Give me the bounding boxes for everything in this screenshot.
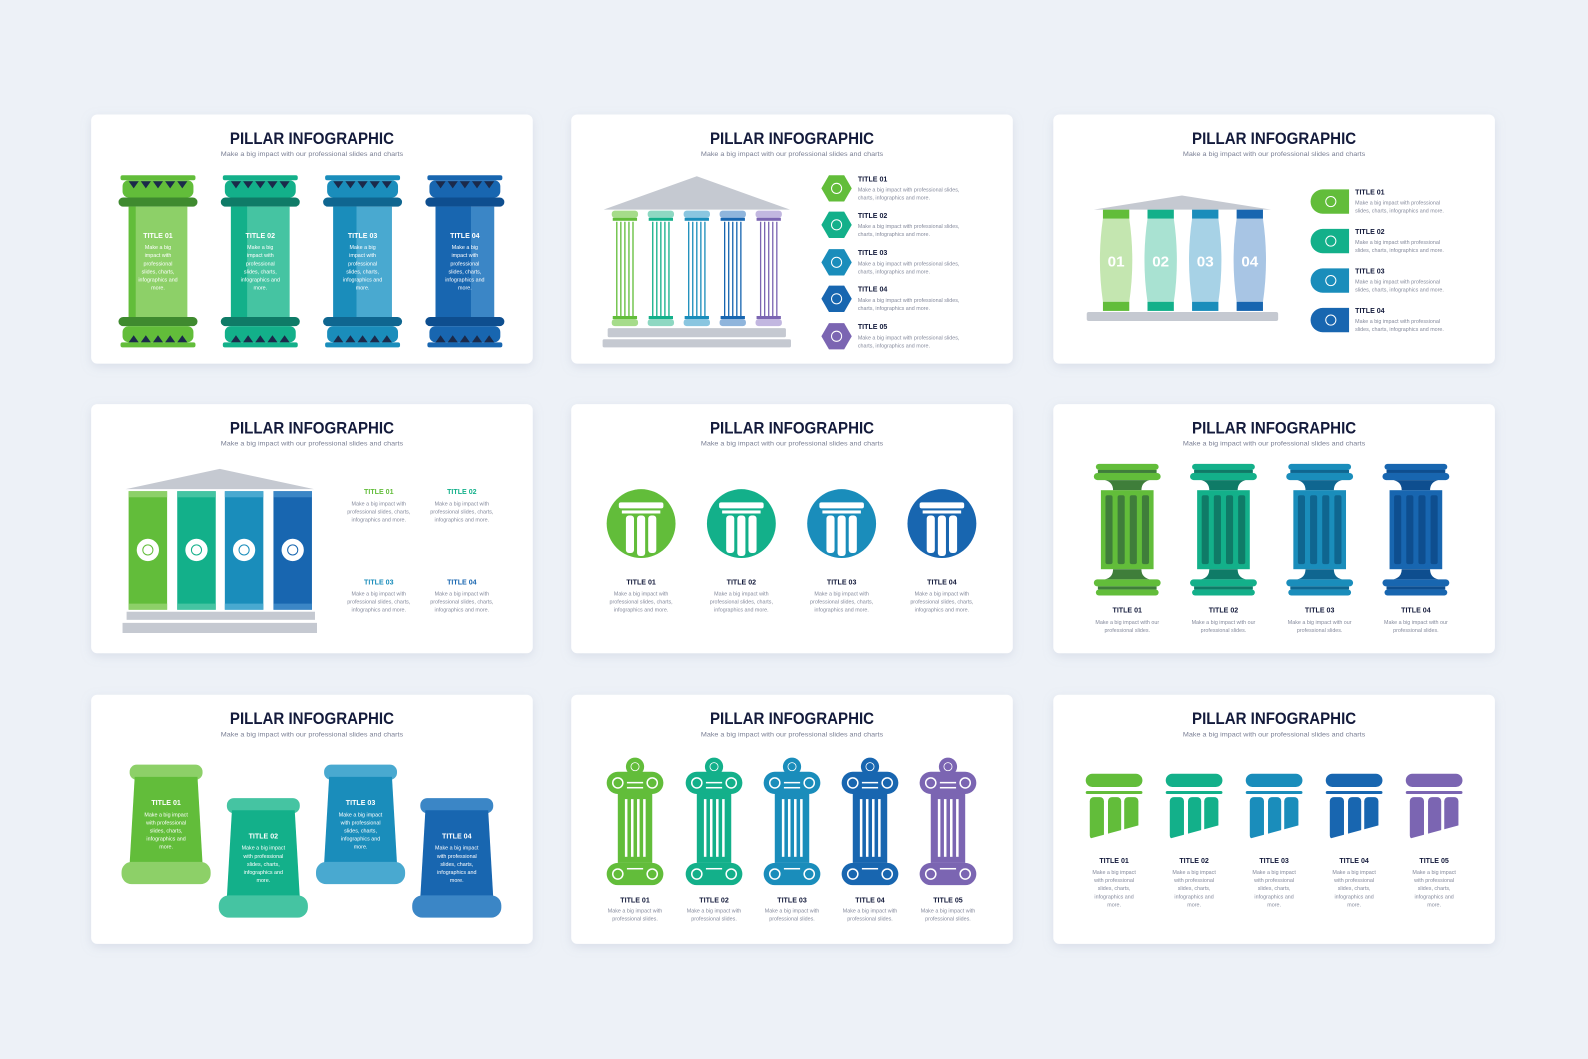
list item 04 — [821, 286, 959, 312]
pillar 01: Make a big impact — [1092, 870, 1136, 876]
column 05: professional slides. — [925, 917, 971, 923]
pillar 05: slides, charts, — [1418, 886, 1451, 892]
pedestal 03: more. — [354, 845, 367, 851]
panel: card 8 ionic columns — [571, 695, 1013, 944]
pillar 03: more. — [1267, 902, 1281, 908]
text block 03: professional slides, charts, — [347, 600, 410, 606]
item 04: TITLE 04 — [927, 578, 957, 586]
heading: PILLAR INFOGRAPHIC — [1192, 419, 1356, 437]
list item 03: slides, charts, infographics and more. — [1355, 288, 1444, 294]
text block 03 — [347, 578, 410, 614]
list item 04: Make a big impact with professional slides, — [858, 298, 959, 304]
item 03 — [807, 489, 876, 614]
pedestal 03: Make a big impact — [339, 812, 383, 818]
heading: Make a big impact with our professional slides and charts — [701, 441, 883, 448]
column 01: Make a big impact with — [608, 909, 662, 915]
list item 01: TITLE 01 — [1355, 188, 1385, 196]
pedestal 01: TITLE 01 — [151, 799, 181, 807]
pillar 03 — [1246, 774, 1302, 908]
text block 04: Make a big impact with — [435, 592, 489, 598]
heading — [701, 710, 883, 738]
column 05 — [920, 758, 976, 923]
item 01: TITLE 01 — [626, 578, 656, 586]
text block 01: TITLE 01 — [364, 488, 394, 496]
column 02: professional slides. — [691, 917, 737, 923]
heading: Make a big impact with our professional slides and charts — [1183, 441, 1365, 448]
column 01 — [607, 758, 663, 923]
heading: PILLAR INFOGRAPHIC — [710, 130, 874, 148]
pillar 05: more. — [1427, 902, 1441, 908]
pillar 01: slides, charts, — [1098, 886, 1130, 892]
pedestal 03: infographics and — [341, 837, 380, 843]
pillar 04: more. — [458, 286, 472, 292]
list item 02: charts, infographics and more. — [858, 232, 930, 238]
list item 03: Make a big impact with professional slides, — [858, 261, 959, 267]
pillar 03: TITLE 03 — [1259, 857, 1289, 865]
pillar 03: more. — [356, 286, 369, 292]
heading: Make a big impact with our professional slides and charts — [221, 151, 403, 158]
pillar 03: infographics and — [1254, 894, 1294, 900]
pillar 04: with professional — [1333, 878, 1374, 884]
list item 04: charts, infographics and more. — [858, 306, 930, 312]
pillar 01 — [1094, 464, 1161, 634]
item 02: Make a big impact with — [714, 592, 769, 598]
pillar 01 — [118, 175, 197, 347]
pillar 01: impact with — [145, 253, 171, 259]
pedestal 01 — [122, 765, 211, 884]
column 04: TITLE 04 — [855, 896, 885, 904]
numbered pillar structure: 02 — [1152, 253, 1169, 270]
text block 03: infographics and more. — [352, 608, 406, 614]
pedestal 02: more. — [256, 878, 270, 884]
item 01: Make a big impact with — [614, 592, 668, 598]
heading: PILLAR INFOGRAPHIC — [710, 710, 874, 728]
heading — [1183, 130, 1365, 158]
pillar 04 — [1326, 774, 1382, 908]
pedestal 03: TITLE 03 — [346, 799, 375, 807]
heading: Make a big impact with our professional slides and charts — [1183, 151, 1365, 158]
pillar 05: with professional — [1413, 878, 1454, 884]
column 02: Make a big impact with — [687, 909, 741, 915]
list item 04: Make a big impact with professional — [1355, 319, 1440, 325]
item 03: professional slides, charts, — [810, 600, 873, 606]
pillar 04: more. — [1347, 902, 1361, 908]
heading — [221, 130, 403, 158]
pillar 03: slides, charts, — [1258, 886, 1290, 892]
pedestal 02: slides, charts, — [247, 862, 280, 868]
pedestal 01: infographics and — [146, 837, 186, 843]
list item 05: TITLE 05 — [858, 323, 887, 331]
numbered pillar structure: 01 — [1108, 253, 1125, 270]
item 02 — [707, 489, 776, 614]
column 01: professional slides. — [612, 917, 658, 923]
list item 01 — [1311, 188, 1444, 215]
pillar 02: slides, charts, — [244, 269, 277, 275]
panel: card 1 tall pillars — [91, 114, 533, 364]
heading — [701, 419, 883, 448]
list item 01 — [821, 175, 959, 202]
pillar 04 — [1382, 464, 1449, 634]
heading: Make a big impact with our professional slides and charts — [221, 731, 403, 738]
pillar 01: TITLE 01 — [1099, 857, 1129, 865]
pedestal 03: slides, charts, — [344, 829, 377, 835]
pillar 03: Make a big impact with our — [1288, 620, 1352, 626]
pillar 01: professional slides. — [1104, 628, 1150, 634]
panel: card 4 temple with icon columns — [91, 404, 533, 653]
list item 03: Make a big impact with professional — [1355, 280, 1440, 286]
pillar 02 — [1166, 774, 1222, 908]
pillar 04: Make a big impact with our — [1384, 620, 1448, 626]
list item 03 — [821, 249, 959, 275]
column 05: TITLE 05 — [933, 896, 963, 904]
pedestal 01: with professional — [145, 820, 186, 826]
pillar 03: professional — [348, 261, 377, 267]
pillar 05: Make a big impact — [1412, 870, 1456, 876]
pillar 01: with professional — [1093, 878, 1134, 884]
pillar 01: Make a big impact with our — [1095, 620, 1159, 626]
text block 03: TITLE 03 — [364, 578, 394, 586]
list item 05: charts, infographics and more. — [858, 343, 930, 349]
item 03: infographics and more. — [814, 608, 869, 614]
pillar 02: more. — [253, 286, 267, 292]
pedestal 01: more. — [159, 845, 173, 851]
text block 04: professional slides, charts, — [430, 600, 493, 606]
list item 02 — [821, 212, 959, 238]
pillar 04: professional — [450, 261, 479, 267]
panel: card 9 slanted pillars — [1053, 695, 1495, 944]
item 04: Make a big impact with — [915, 592, 969, 598]
pillar 01 — [1086, 774, 1142, 908]
pillar 01: more. — [1107, 902, 1121, 908]
list item 04: slides, charts, infographics and more. — [1355, 327, 1444, 333]
pillar 02 — [221, 175, 300, 347]
column 03 — [764, 758, 820, 923]
numbered pillar structure: 04 — [1241, 253, 1259, 270]
pillar 03: slides, charts, — [346, 269, 379, 275]
pillar 01: slides, charts, — [142, 269, 174, 275]
pillar 02 — [1190, 464, 1257, 634]
list item 01: Make a big impact with professional slides, — [858, 187, 959, 193]
pillar 03 — [1286, 464, 1353, 634]
list item 04: TITLE 04 — [858, 286, 887, 294]
pillar 04: TITLE 04 — [1339, 857, 1369, 865]
list item 02: TITLE 02 — [858, 212, 887, 220]
column 04 — [842, 758, 898, 923]
pedestal 02: with professional — [242, 854, 283, 860]
list item 05 — [821, 323, 959, 349]
pillar 03: TITLE 03 — [1305, 607, 1334, 615]
pillar 02: professional — [246, 261, 275, 267]
heading: Make a big impact with our professional slides and charts — [1183, 731, 1365, 738]
text block 01 — [347, 488, 410, 524]
pillar 04: Make a big impact — [1332, 870, 1376, 876]
pillar 04: infographics and — [1334, 894, 1374, 900]
item 04 — [907, 489, 976, 614]
pillar 05: TITLE 05 — [1419, 857, 1449, 865]
pillar 02: more. — [1187, 902, 1201, 908]
pillar 02: professional slides. — [1201, 628, 1246, 634]
column 04: Make a big impact with — [843, 909, 897, 915]
item 01 — [607, 489, 676, 614]
pillar 02: Make a big — [247, 245, 273, 251]
pedestal 04: slides, charts, — [440, 862, 473, 868]
text block 04 — [430, 578, 493, 614]
pedestal 01: Make a big impact — [144, 812, 188, 818]
pillar 04: infographics and — [445, 278, 485, 284]
list item 03 — [1311, 267, 1444, 294]
heading — [701, 130, 883, 158]
pillar 01: TITLE 01 — [1112, 607, 1142, 615]
list item 01: TITLE 01 — [858, 175, 887, 183]
text block 04: TITLE 04 — [447, 578, 477, 586]
column 02 — [686, 758, 742, 923]
pillar 02: TITLE 02 — [1209, 607, 1238, 615]
pillar 05: infographics and — [1414, 894, 1454, 900]
list item 02 — [1311, 228, 1444, 254]
pillar 03: Make a big — [349, 245, 376, 251]
list item 02: slides, charts, infographics and more. — [1355, 248, 1444, 254]
heading: PILLAR INFOGRAPHIC — [230, 710, 394, 728]
heading — [1183, 419, 1365, 448]
pillar 02: Make a big impact with our — [1192, 620, 1256, 626]
panel: card 3 numbered pillars — [1053, 114, 1495, 364]
pillar 04: Make a big — [452, 245, 478, 251]
pillar 04 — [425, 175, 504, 347]
numbered pillar structure — [1087, 195, 1278, 321]
pillar 02: with professional — [1173, 878, 1214, 884]
pillar 02: infographics and — [1174, 894, 1214, 900]
pedestal 04: infographics and — [437, 870, 476, 876]
heading — [221, 419, 403, 448]
list item 03: charts, infographics and more. — [858, 269, 930, 275]
pillar 01: TITLE 01 — [143, 232, 173, 240]
pillar 02: Make a big impact — [1172, 870, 1216, 876]
pillar 01: infographics and — [1094, 894, 1134, 900]
pillar 02: slides, charts, — [1178, 886, 1210, 892]
panel: card 5 circle icons — [571, 404, 1013, 653]
pillar 03: infographics and — [343, 278, 382, 284]
pedestal 04: with professional — [436, 854, 477, 860]
pillar 01: infographics and — [138, 278, 178, 284]
panel: card 2 temple with list — [571, 114, 1013, 364]
text block 02: professional slides, charts, — [430, 509, 493, 515]
text block 02: TITLE 02 — [447, 488, 477, 496]
pillar 04: slides, charts, — [1338, 886, 1370, 892]
list item 02: Make a big impact with professional — [1355, 240, 1440, 246]
column 03: professional slides. — [769, 917, 815, 923]
pedestal 04: TITLE 04 — [442, 833, 472, 841]
list item 03: TITLE 03 — [858, 249, 887, 257]
heading — [221, 710, 403, 738]
text block 04: infographics and more. — [435, 608, 489, 614]
heading: Make a big impact with our professional slides and charts — [701, 151, 883, 158]
column 03: TITLE 03 — [777, 896, 807, 904]
temple illustration — [603, 176, 791, 347]
list item 01: slides, charts, infographics and more. — [1355, 209, 1444, 215]
pillar 01: professional — [144, 261, 172, 267]
temple with colored columns — [123, 469, 317, 633]
list item 03: TITLE 03 — [1355, 267, 1385, 275]
panel: card 7 pedestals — [91, 695, 533, 944]
pedestal 03: with professional — [340, 820, 381, 826]
pillar 04: TITLE 04 — [450, 232, 480, 240]
heading — [1183, 710, 1365, 738]
pedestal 04: Make a big impact — [435, 846, 479, 852]
heading: PILLAR INFOGRAPHIC — [1192, 710, 1356, 728]
column 05: Make a big impact with — [921, 909, 975, 915]
list item 01: charts, infographics and more. — [858, 196, 930, 202]
pedestal 04 — [412, 798, 501, 918]
heading: PILLAR INFOGRAPHIC — [230, 130, 394, 148]
list item 01: Make a big impact with professional — [1355, 201, 1440, 207]
text block 01: Make a big impact with — [352, 501, 406, 507]
pillar 02: TITLE 02 — [246, 232, 275, 240]
pedestal 01: slides, charts, — [150, 829, 182, 835]
pillar 01: Make a big — [145, 245, 171, 251]
list item 04: TITLE 04 — [1355, 307, 1385, 315]
pedestal 04: more. — [450, 878, 464, 884]
list item 02: TITLE 02 — [1355, 228, 1385, 236]
heading: Make a big impact with our professional slides and charts — [701, 731, 883, 738]
pillar 04: slides, charts, — [448, 269, 481, 275]
item 01: professional slides, charts, — [610, 600, 673, 606]
list item 02: Make a big impact with professional slides, — [858, 224, 959, 230]
item 02: infographics and more. — [714, 608, 769, 614]
text block 01: professional slides, charts, — [347, 509, 410, 515]
column 02: TITLE 02 — [699, 896, 729, 904]
heading: PILLAR INFOGRAPHIC — [230, 419, 394, 437]
column 04: professional slides. — [847, 917, 893, 923]
pedestal 02: Make a big impact — [242, 846, 286, 852]
pillar 01: more. — [151, 286, 165, 292]
item 02: TITLE 02 — [727, 578, 756, 586]
pedestal 02: infographics and — [244, 870, 283, 876]
text block 02: Make a big impact with — [435, 501, 489, 507]
pillar 03 — [323, 175, 402, 347]
numbered pillar structure: 03 — [1197, 253, 1214, 270]
pillar 02: impact with — [247, 253, 274, 259]
list item 04 — [1311, 307, 1444, 333]
item 01: infographics and more. — [614, 608, 668, 614]
pillar 04: impact with — [451, 253, 478, 259]
heading: PILLAR INFOGRAPHIC — [1192, 130, 1356, 148]
item 03: Make a big impact with — [814, 592, 869, 598]
item 03: TITLE 03 — [827, 578, 856, 586]
pillar 03: TITLE 03 — [348, 232, 377, 240]
pillar 03: professional slides. — [1297, 628, 1342, 634]
pillar 05 — [1406, 774, 1462, 908]
item 04: infographics and more. — [915, 608, 969, 614]
panel: card 6 fluted pillars — [1053, 404, 1495, 653]
pillar 03: impact with — [349, 253, 376, 259]
list item 05: Make a big impact with professional slides, — [858, 335, 959, 341]
item 02: professional slides, charts, — [710, 600, 773, 606]
heading: PILLAR INFOGRAPHIC — [710, 419, 874, 437]
column 03: Make a big impact with — [765, 909, 819, 915]
pedestal 02 — [219, 798, 308, 918]
pillar 02: infographics and — [241, 278, 280, 284]
pillar 03: with professional — [1253, 878, 1294, 884]
column 01: TITLE 01 — [620, 896, 650, 904]
text block 03: Make a big impact with — [352, 592, 406, 598]
pillar 04: TITLE 04 — [1401, 607, 1431, 615]
text block 01: infographics and more. — [352, 518, 406, 524]
pedestal 03 — [316, 765, 405, 884]
item 04: professional slides, charts, — [910, 600, 973, 606]
pedestal 02: TITLE 02 — [249, 833, 278, 841]
pillar 02: TITLE 02 — [1179, 857, 1209, 865]
text block 02 — [430, 488, 493, 524]
pillar 03: Make a big impact — [1252, 870, 1296, 876]
text block 02: infographics and more. — [435, 518, 489, 524]
heading: Make a big impact with our professional slides and charts — [221, 441, 403, 448]
pillar 04: professional slides. — [1393, 628, 1439, 634]
